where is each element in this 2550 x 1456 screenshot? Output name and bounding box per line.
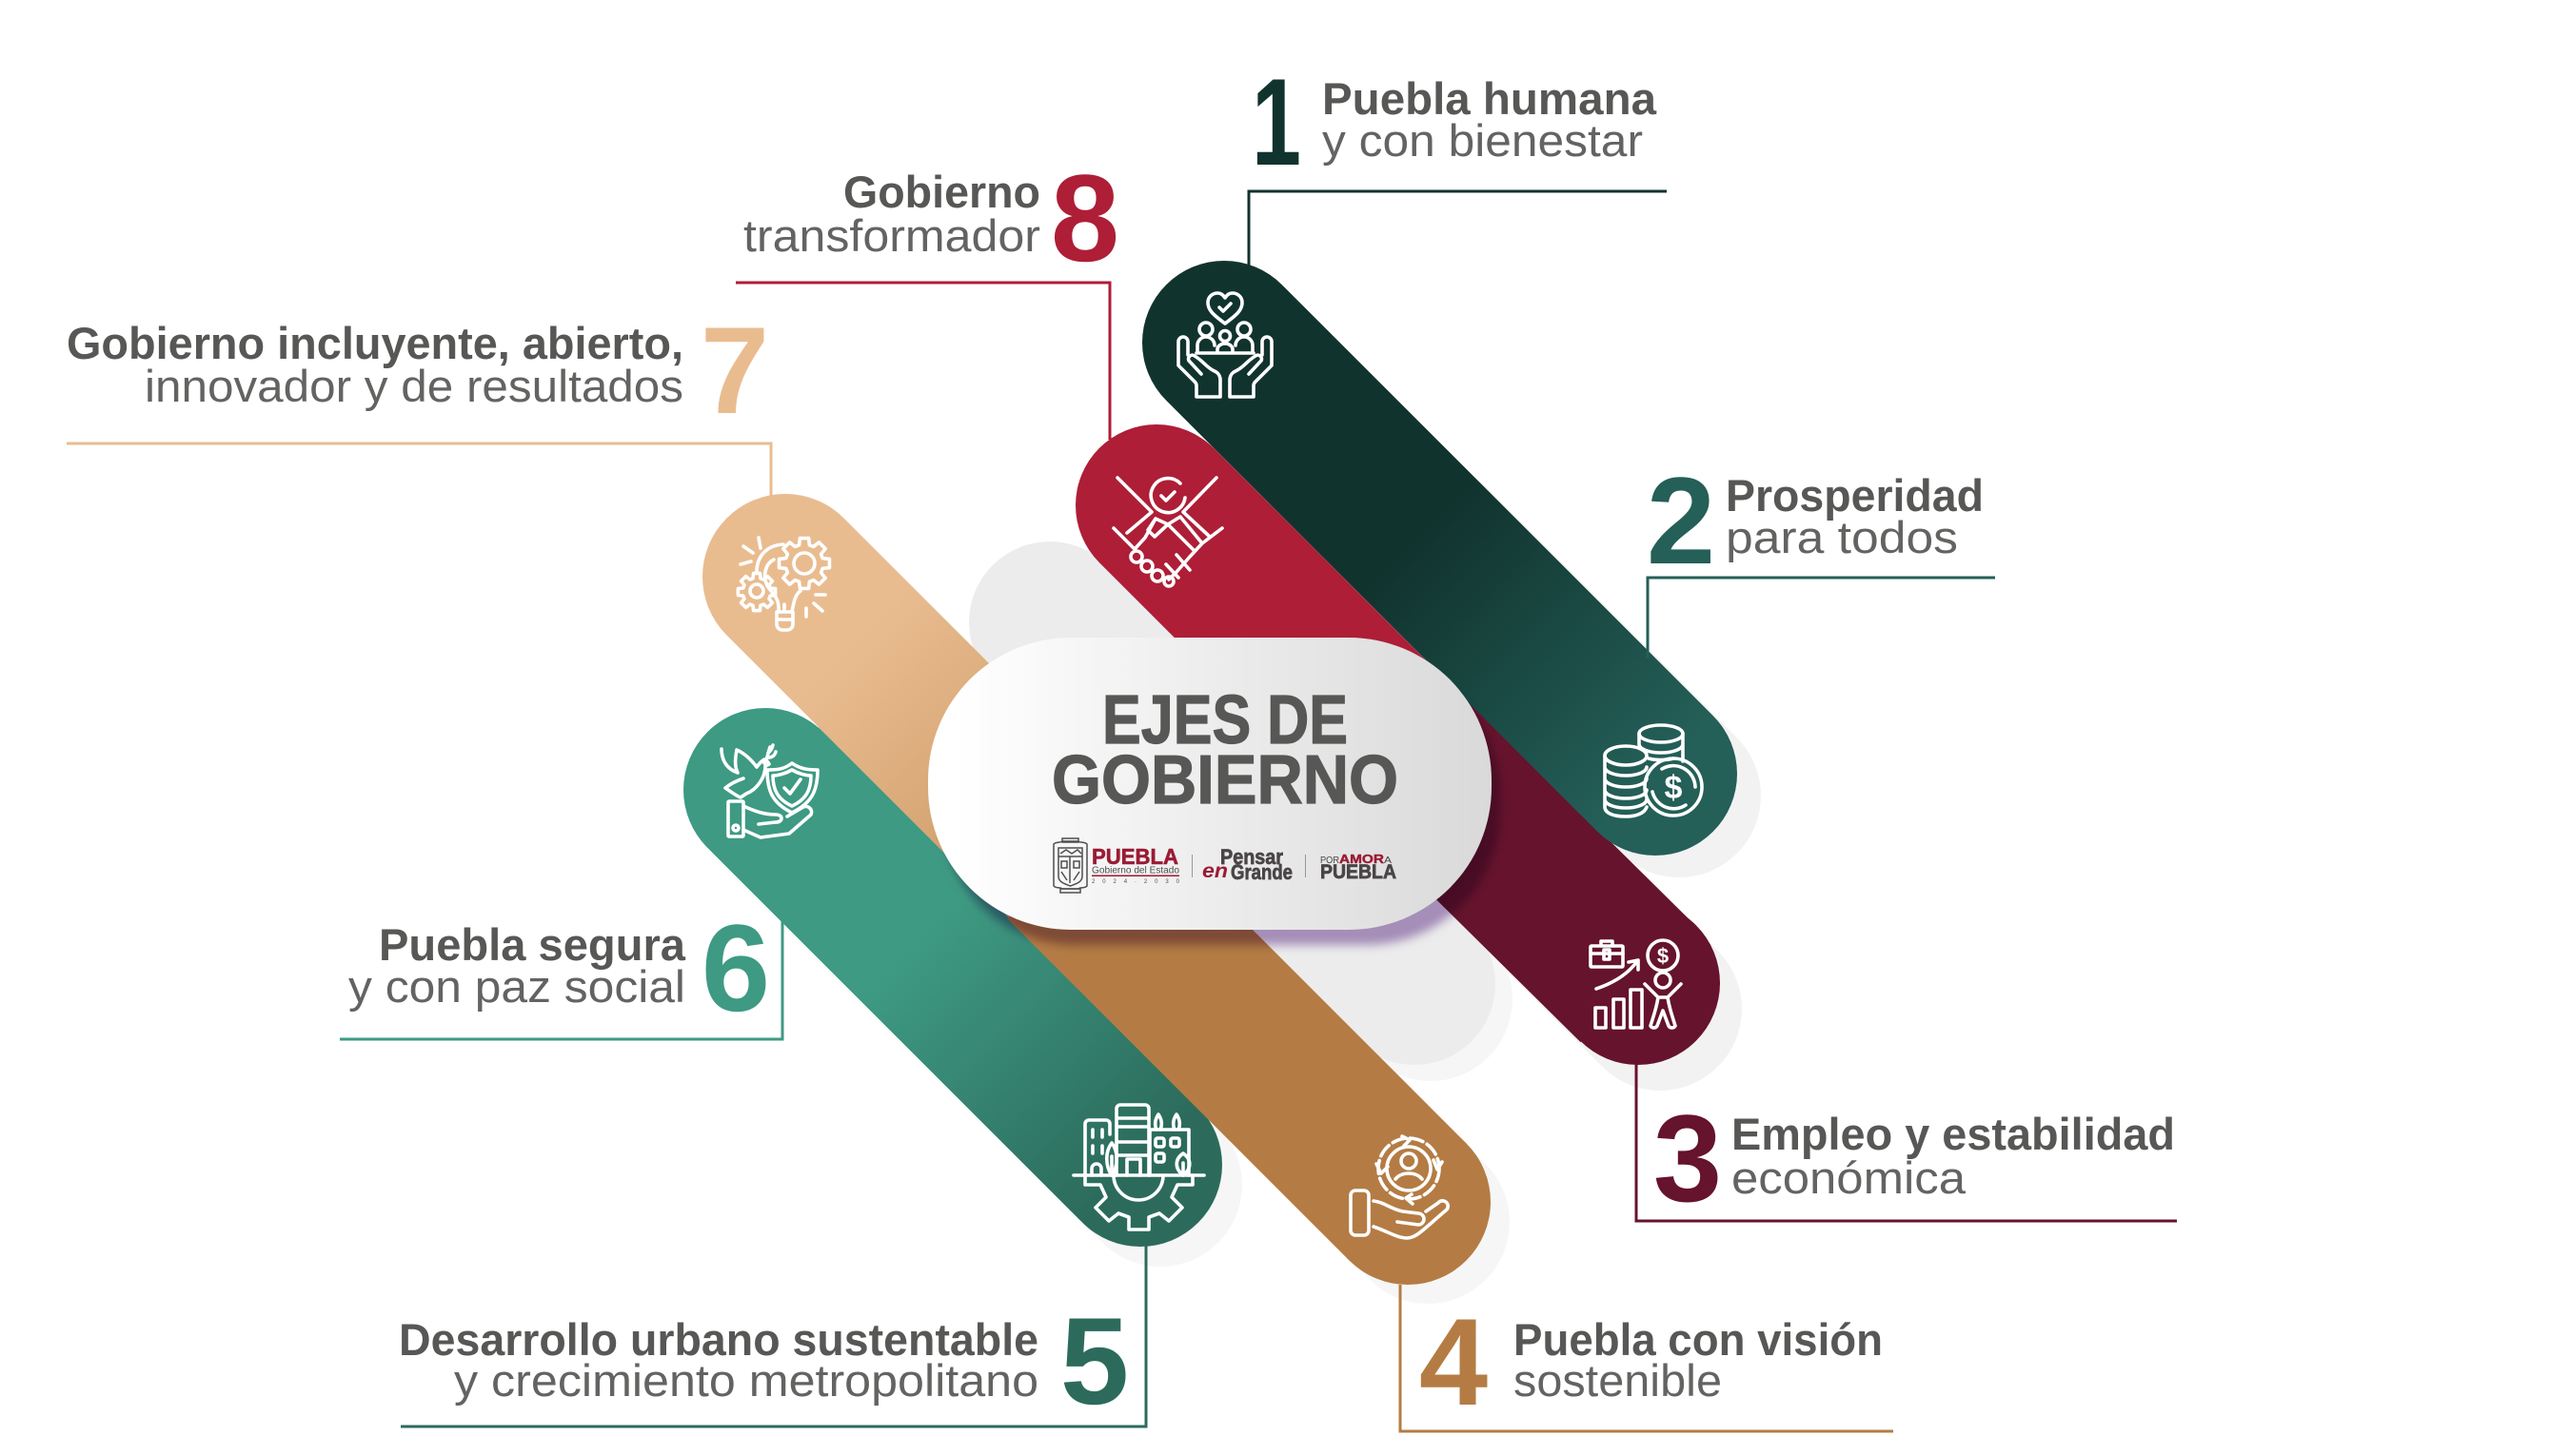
label 5: Desarrollo urbano sustentable: Desarrollo urbano sustentable — [399, 1314, 1038, 1365]
label 4: Puebla con visión sostenible: sostenible — [1513, 1355, 1722, 1406]
label 8: Gobierno transformador — [743, 148, 1119, 287]
title: EJES DE — [1102, 682, 1348, 758]
label 3: Empleo y estabilidad económica: Empleo y estabilidad — [1731, 1109, 2175, 1159]
icon: coins with dollar — [1605, 725, 1702, 817]
label 7: Gobierno incluyente — [67, 301, 769, 440]
label 7: Gobierno incluyente: 7 — [701, 301, 769, 440]
label 8: Gobierno transformador: transformador — [743, 210, 1040, 261]
pill: axis 4 — [1066, 860, 1491, 1285]
center card shadow — [942, 661, 1500, 945]
pill: axes 1 and 2 — [1224, 343, 1655, 774]
label 3: Empleo y estabilidad económica: económica — [1731, 1152, 1967, 1203]
label 4: Puebla con visión sostenible: 4 — [1419, 1292, 1488, 1431]
label 8: Gobierno transformador: 8 — [1051, 148, 1119, 287]
logo: Puebla Gobierno del Estado: 2 0 2 4 · 2 0 3 0 — [1092, 879, 1180, 885]
pill: axis 8 — [1156, 505, 1380, 729]
logo: Pensar en Grande: en — [1202, 860, 1228, 882]
icon: hands holding family with heart — [1178, 293, 1272, 397]
label 3: Empleo y estabilidad económica: 3 — [1653, 1089, 1722, 1228]
icon: dove, shield and hand — [722, 745, 818, 837]
label 1: Puebla humana: y con bienestar — [1322, 115, 1643, 166]
icon: employment growth: $ — [1657, 944, 1669, 968]
title — [1052, 682, 1398, 818]
label 3: Empleo y estabilidad económica — [1653, 1089, 2175, 1228]
label 2: Prosperidad para todos: 2 — [1647, 451, 1715, 590]
logo: Por amor a Puebla — [1320, 852, 1396, 883]
logo: Pensar en Grande: Pensar — [1220, 845, 1283, 869]
logo: Por amor a Puebla: A — [1384, 856, 1392, 866]
label 8: Gobierno transformador: Gobierno — [843, 167, 1040, 217]
label 2: Prosperidad para todos: para todos — [1726, 512, 1958, 562]
label 6: Puebla segura: y con paz social — [348, 961, 685, 1012]
logo: Pensar en Grande — [1192, 845, 1306, 884]
label 5: Desarrollo urbano sustentable — [399, 1291, 1129, 1430]
label 7: Gobierno incluyente: innovador y de resultados — [145, 361, 683, 411]
pill: axes 6 and 5 — [765, 790, 1140, 1165]
logo: Puebla Gobierno del Estado: Gobierno del Estado — [1092, 866, 1179, 876]
pill: axis 7 — [785, 577, 1142, 934]
connector lines — [67, 191, 2177, 1431]
label 6: Puebla segura: 6 — [702, 898, 770, 1037]
grey background pill — [1050, 622, 1414, 984]
label 6: Puebla segura — [348, 898, 770, 1037]
icon: light bulb with gears — [738, 538, 829, 630]
label 1: Puebla humana: 1 — [1252, 52, 1301, 191]
label 5: Desarrollo urbano sustentable: y crecimiento metropolitano — [454, 1355, 1038, 1406]
label 2: Prosperidad para todos — [1647, 451, 1984, 590]
icon: urban city on gear — [1074, 1105, 1204, 1230]
label 2: Prosperidad para todos: Prosperidad — [1726, 470, 1984, 521]
label 1: Puebla humana — [1252, 52, 1657, 191]
icon: coins with dollar: $ — [1665, 770, 1683, 806]
logo: Pensar en Grande: Grande — [1231, 860, 1293, 884]
label 1: Puebla humana: Puebla humana — [1322, 73, 1657, 124]
logo: Por amor a Puebla: PUEBLA — [1320, 861, 1396, 883]
logo: Puebla Gobierno del Estado: PUEBLA — [1092, 844, 1178, 869]
label 4: Puebla con visión sostenible — [1419, 1292, 1883, 1431]
logo: Puebla coat of arms — [1054, 838, 1087, 893]
logo: Puebla Gobierno del Estado — [1092, 844, 1180, 885]
icon: handshake with check — [1114, 478, 1222, 586]
logo: Por amor a Puebla: AMOR — [1339, 852, 1385, 866]
pill shadows — [1018, 544, 1679, 1222]
title: GOBIERNO — [1052, 742, 1398, 818]
label 4: Puebla con visión sostenible: Puebla con visión — [1513, 1314, 1883, 1365]
center card — [928, 638, 1492, 930]
pill: axis 3 — [1380, 729, 1720, 1065]
label 6: Puebla segura: Puebla segura — [379, 919, 686, 970]
label 5: Desarrollo urbano sustentable: 5 — [1060, 1291, 1129, 1430]
logo: Por amor a Puebla: POR — [1320, 856, 1339, 866]
label 7: Gobierno incluyente: Gobierno incluyente, abierto, — [67, 318, 683, 368]
icon: hand with person and cycle — [1351, 1136, 1448, 1238]
icon: employment growth — [1591, 940, 1681, 1028]
